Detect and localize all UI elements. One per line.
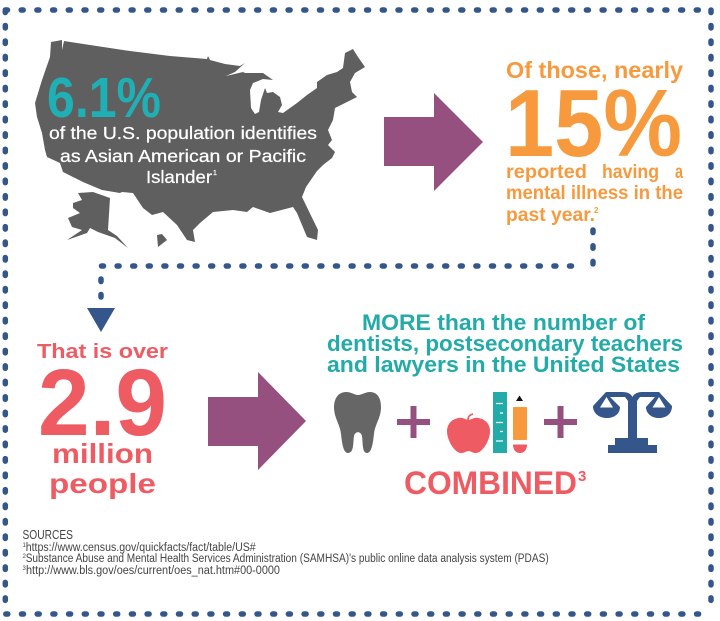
panel: comparison (327, 310, 683, 501)
text block: sources: 2 (22, 554, 26, 560)
label: combined: 3 (578, 468, 586, 485)
icon: scales of justice (593, 392, 672, 453)
icon: plus (397, 406, 430, 438)
arrow: to mental illness share (384, 93, 483, 191)
mental illness description: having (602, 162, 659, 183)
mental illness description (506, 162, 683, 226)
text block: sources: SOURCES (22, 527, 73, 542)
unit second line: people (49, 468, 156, 499)
population description: of the U.S. population identifies (49, 123, 317, 143)
text block: sources (22, 527, 549, 577)
comparison heading: dentists, postsecondary teachers (327, 331, 683, 356)
comparison heading: and lawyers in the United States (327, 352, 680, 377)
population description: as Asian American or Pacific (60, 146, 306, 166)
text block: sources: 1 (22, 543, 26, 549)
unit: million people: million (52, 438, 153, 469)
map of the United States (35, 40, 365, 248)
icon: pencil (513, 396, 527, 453)
panel: population share (35, 40, 365, 248)
population description: Islander (146, 167, 212, 187)
panel: people count (37, 341, 168, 499)
label: combined: COMBINED (404, 465, 577, 501)
text block: sources: http://www.bls.gov/oes/current/oes_nat.htm#00-0000 (26, 565, 280, 577)
panel: mental illness share (505, 57, 683, 226)
mental illness description: reported (506, 162, 587, 183)
comparison heading (327, 310, 683, 377)
icon: tooth (334, 392, 381, 453)
lead-in text: Of those, nearly (506, 57, 683, 83)
dotted connector with down arrow (87, 230, 593, 332)
mental illness description: past year. (506, 205, 595, 226)
mental illness description: 2 (594, 206, 599, 215)
text block: sources: Substance Abuse and Mental Health Services Administration (SAMHSA)'s public online data analysis system (PDAS) (26, 553, 549, 565)
statistic: 2.9: 2.9 (38, 350, 167, 456)
text block: sources: https://www.census.gov/quickfacts/fact/table/US# (26, 542, 256, 554)
icon: plus (544, 406, 577, 438)
population description: 1 (213, 170, 217, 177)
lead-in text: That is over (37, 341, 168, 363)
statistic: 15%: 15% (505, 70, 682, 177)
mental illness description: mental illness in the (506, 183, 683, 204)
comparison heading: MORE than the number of (362, 310, 646, 335)
mental illness description: a (675, 162, 683, 183)
text block: sources: 3 (22, 566, 26, 572)
arrow: to comparison (208, 372, 306, 470)
statistic: 6.1%: 6.1% (47, 66, 161, 130)
icon: apple (447, 414, 490, 453)
population description (49, 123, 317, 187)
icon: ruler (493, 392, 507, 453)
